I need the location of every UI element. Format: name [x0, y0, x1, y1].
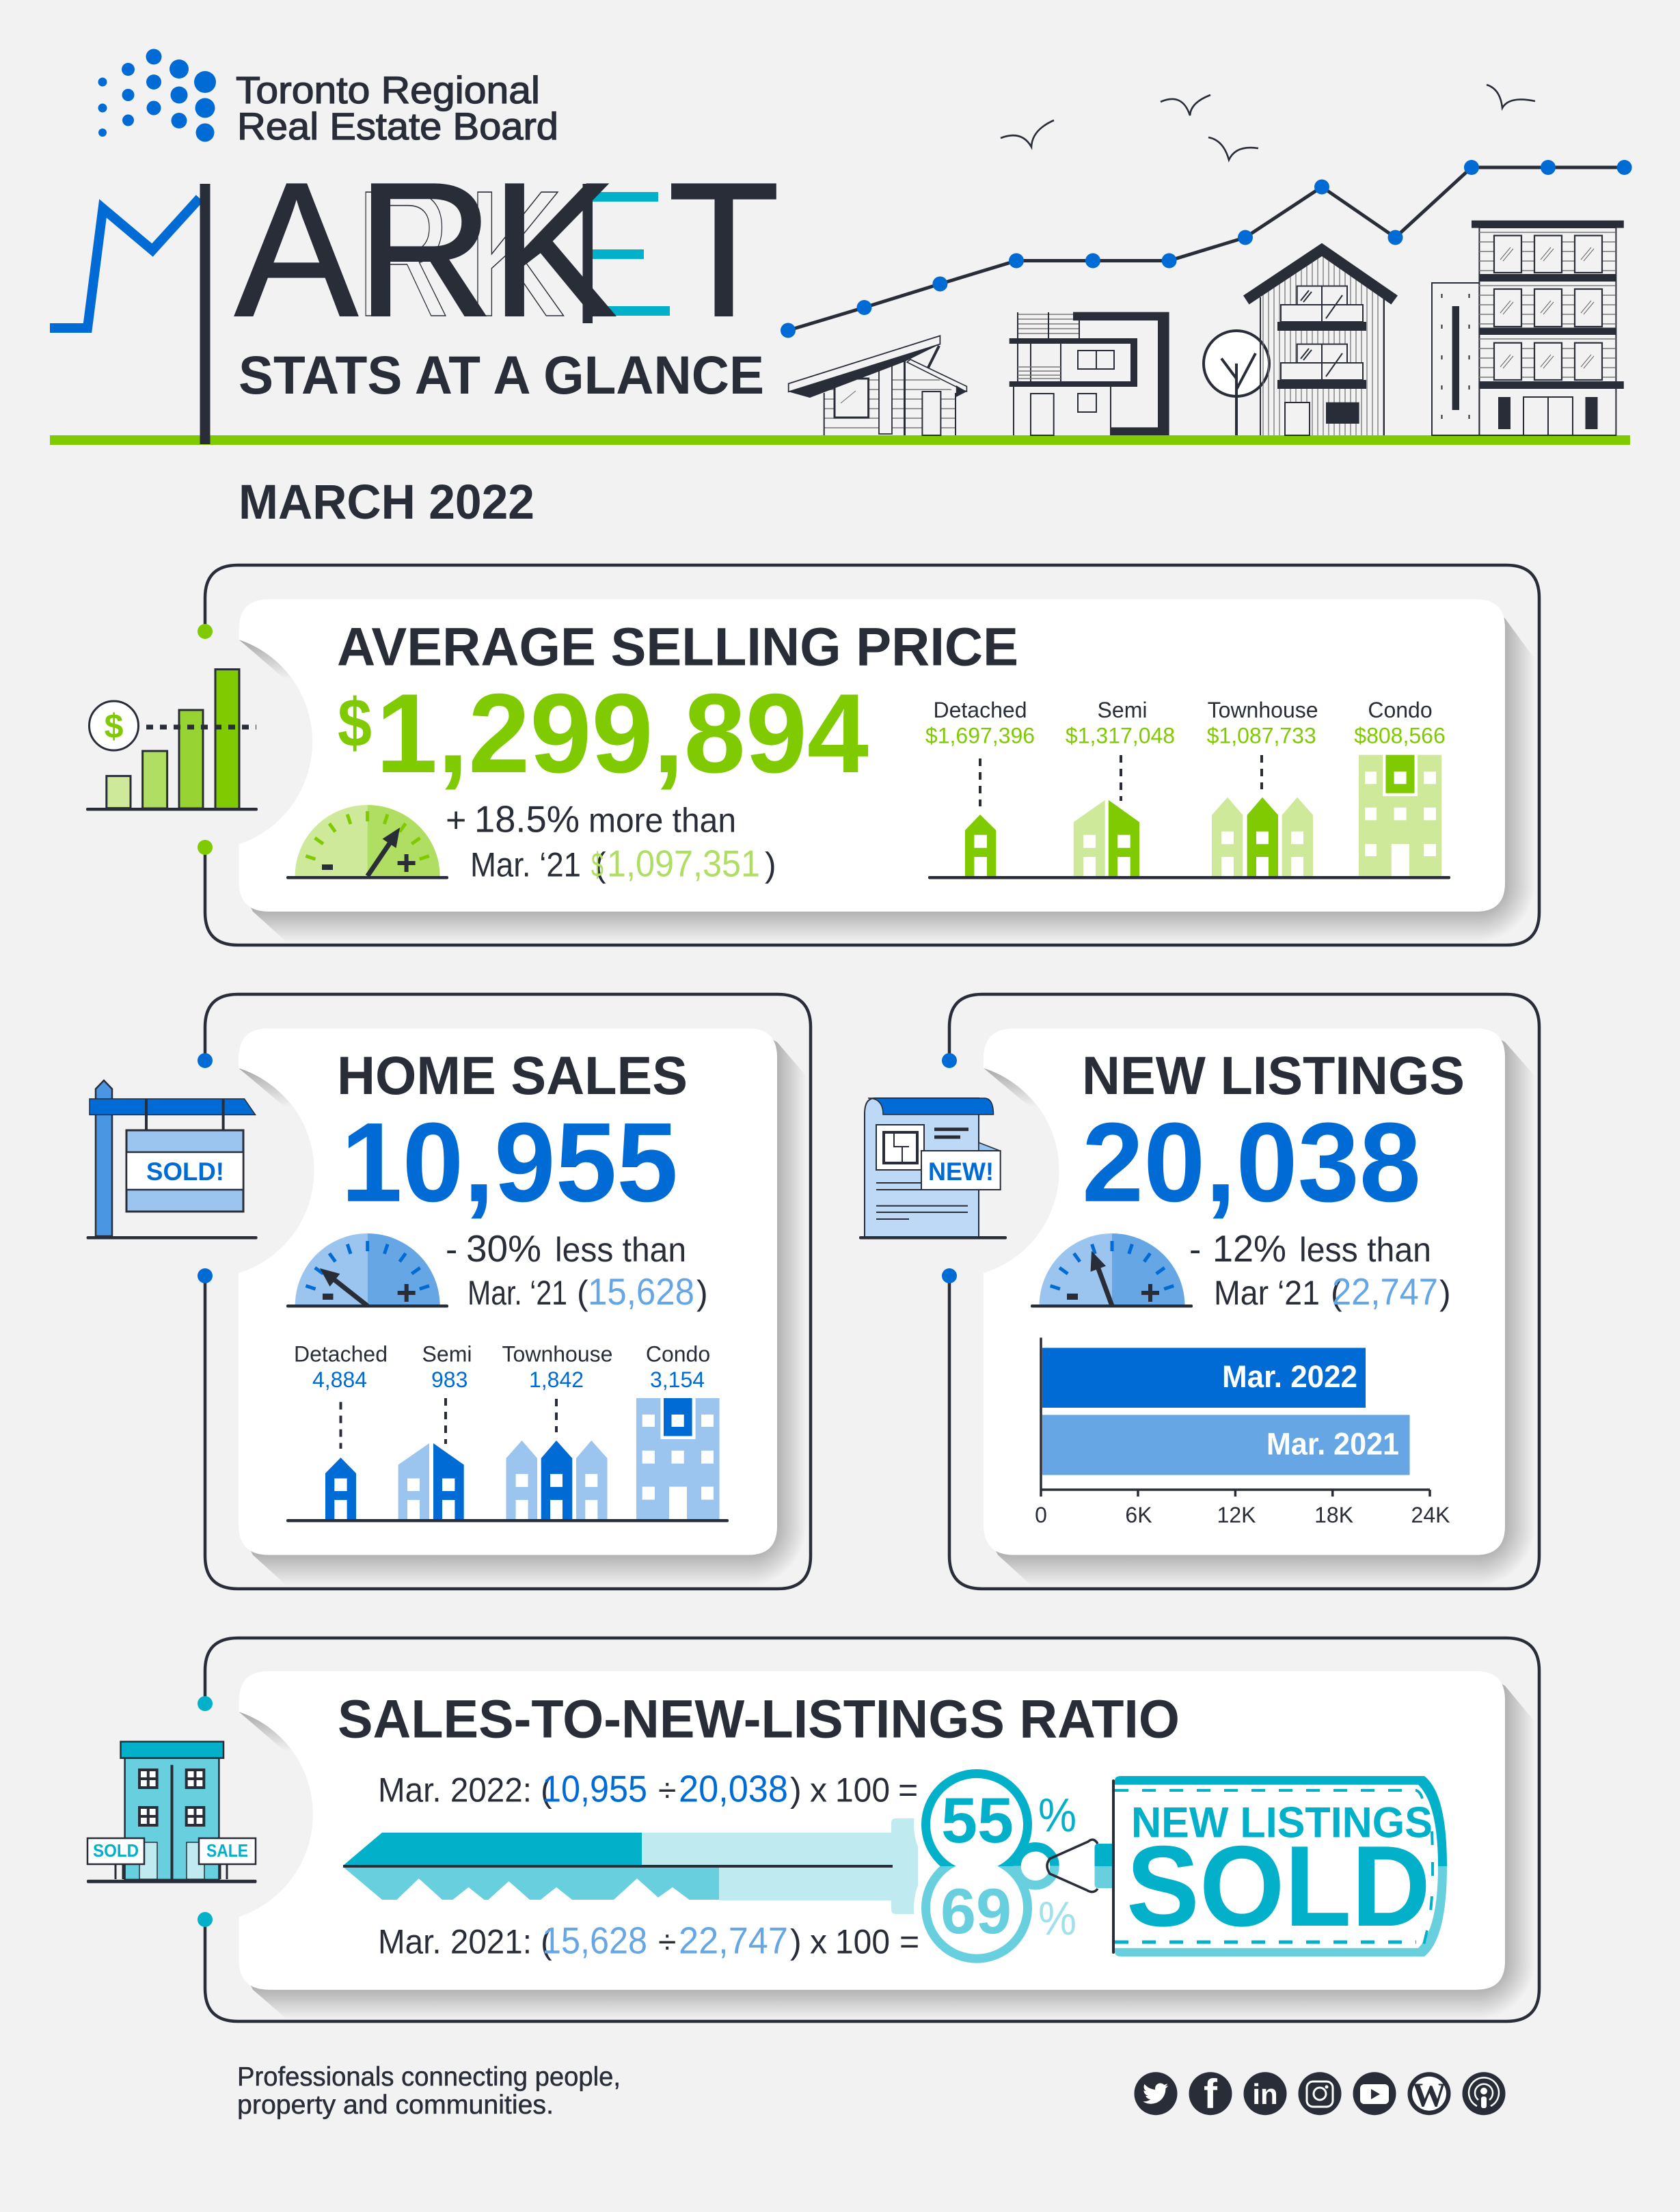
property type prices [925, 698, 1446, 748]
house: gable townhouse [1243, 243, 1398, 435]
big number: 20,038 [1082, 1100, 1421, 1225]
change text: 1,097,351 [607, 842, 760, 884]
change text: more than [588, 802, 736, 840]
formula: March 2022: ) [790, 1771, 802, 1810]
card shadow [239, 605, 1535, 942]
bar chart: listings [1035, 1338, 1450, 1527]
bar chart: listings: 24K [1411, 1503, 1450, 1527]
icon: logo dot cluster [98, 49, 216, 142]
icon: tree [1204, 331, 1269, 435]
tagline: property and communities. [237, 2090, 554, 2120]
change text: Mar. ‘21 [470, 846, 581, 884]
property type sales: 983 [431, 1367, 468, 1392]
logo wordmark: Toronto Regional [236, 68, 540, 111]
letter E bars [593, 192, 670, 316]
heading: SALES-TO-NEW-LISTINGS RATIO [338, 1689, 1180, 1749]
property type sales: 4,884 [312, 1367, 367, 1392]
birds [1001, 85, 1535, 160]
house: pitched roof [789, 336, 966, 435]
property type prices: $1,697,396 [925, 724, 1035, 748]
figure-eight percent badge: 55 [941, 1784, 1014, 1856]
change text: less than [1299, 1231, 1431, 1269]
semi [1074, 800, 1139, 876]
solid letters [234, 144, 780, 357]
property type prices: Townhouse [1208, 698, 1318, 722]
solid letters: A [234, 144, 359, 357]
formula: March 2021: Mar. 2021: [378, 1923, 532, 1961]
house: modern frame [1010, 312, 1169, 435]
white card [239, 599, 1505, 912]
icon: building for sale: SOLD [93, 1840, 139, 1861]
tagline: Professionals connecting people, [237, 2062, 621, 2092]
change text [1189, 1227, 1451, 1313]
formula: March 2021: x [810, 1923, 827, 1961]
formula: March 2022 [378, 1768, 918, 1810]
panel: average selling price [86, 565, 1539, 945]
formula: March 2021: = [899, 1923, 919, 1961]
logo wordmark [236, 68, 558, 148]
icon row: housing types [286, 1398, 729, 1523]
property type sales: Semi [422, 1342, 472, 1367]
logo wordmark: Real Estate Board [237, 105, 558, 148]
outlined letters: K [465, 153, 565, 354]
formula: March 2022: ÷ [658, 1773, 676, 1810]
change text: ( [595, 846, 606, 884]
property type prices: Semi [1098, 698, 1147, 722]
tagline [237, 2062, 621, 2120]
detached [325, 1458, 356, 1519]
panel: sales-to-new-listings ratio [87, 1638, 1539, 2021]
outlined letters: R [355, 153, 452, 354]
condo [636, 1398, 720, 1519]
connector dots [198, 1696, 213, 1927]
solid letters: K [490, 144, 617, 357]
change text: ) [696, 1274, 708, 1312]
price tag [1047, 1776, 1447, 1956]
bar chart: listings: 12K [1217, 1503, 1256, 1527]
property type sales: Detached [294, 1342, 388, 1367]
property type sales: Condo [646, 1342, 710, 1367]
white card [239, 1028, 777, 1555]
line chart: market trend [781, 160, 1632, 338]
icon: wordpress: W [1412, 2075, 1446, 2114]
key graphic [343, 1818, 918, 1914]
property type prices: $1,087,733 [1207, 724, 1316, 748]
property type sales: 3,154 [650, 1367, 705, 1392]
bar chart: listings: Mar. 2021 [1266, 1427, 1399, 1461]
change text: Mar. ‘21 [468, 1274, 567, 1312]
connector dots [198, 1053, 213, 1283]
panel outline [949, 994, 1539, 1589]
building: apartment tower [1432, 221, 1624, 435]
property type prices: Detached [934, 698, 1027, 722]
panel outline [205, 1638, 1539, 2021]
figure-eight percent badge: % [1038, 1892, 1076, 1945]
white card [239, 1671, 1505, 1990]
property type prices: $808,566 [1354, 724, 1446, 748]
icon: sold sign [87, 1080, 258, 1240]
card shadow [239, 1032, 807, 1586]
formula: March 2021 [378, 1920, 919, 1962]
formula: March 2022: 100 [835, 1771, 890, 1810]
letter M drawn as blue graph line [50, 198, 200, 328]
gauge: up [286, 805, 448, 879]
change text: ( [577, 1274, 588, 1312]
E stem [582, 184, 593, 323]
bar chart: listings: Mar. 2022 [1222, 1359, 1357, 1394]
icon: sold sign: SOLD! [146, 1158, 224, 1186]
figure-eight percent badge: 69 [940, 1875, 1012, 1947]
big number: 1,299,894 [376, 670, 869, 796]
property type sales: 1,842 [529, 1367, 584, 1392]
formula: March 2021: 22,747 [679, 1920, 788, 1962]
icon: facebook [1189, 2071, 1232, 2117]
ground line [50, 435, 1630, 445]
change text: 22,747 [1332, 1270, 1438, 1313]
formula: March 2021: 15,628 [542, 1920, 647, 1962]
townhouse [1212, 797, 1313, 876]
outlined letters [355, 153, 565, 354]
condo [1359, 755, 1441, 876]
heading: NEW LISTINGS [1082, 1045, 1465, 1106]
subtitle: STATS AT A GLANCE [239, 344, 764, 405]
change text: 30% [466, 1227, 541, 1270]
icon: new listing document [859, 1098, 1007, 1240]
formula: March 2022: 10,955 [542, 1768, 647, 1810]
logo: Toronto Regional Real Estate Board [98, 49, 558, 148]
solid letters: R [356, 144, 494, 357]
card shadow [239, 1676, 1535, 2019]
icon: new listing document: NEW! [928, 1158, 994, 1186]
icon: building for sale [87, 1742, 257, 1883]
bar chart: listings: 6K [1125, 1503, 1152, 1527]
panel: home sales [87, 994, 811, 1589]
figure-eight percent badge: % [1038, 1788, 1076, 1842]
formula: March 2022: ( [541, 1771, 552, 1810]
big number: $ [338, 685, 372, 761]
formula: March 2022: Mar. 2022: [378, 1771, 532, 1810]
change text: 12% [1212, 1227, 1286, 1270]
change text: + [446, 801, 466, 841]
semi [398, 1443, 464, 1519]
big number: 10,955 [341, 1100, 678, 1225]
panel outline [205, 565, 1539, 945]
detached [965, 815, 996, 876]
change text: less than [555, 1231, 686, 1269]
change text: Mar ‘21 [1214, 1274, 1320, 1312]
property type sales: Townhouse [502, 1342, 612, 1367]
icon: facebook: f [1204, 2071, 1218, 2117]
white card [984, 1028, 1505, 1555]
panel: new listings [859, 994, 1539, 1589]
property type sales [294, 1342, 710, 1392]
ring [1016, 1847, 1055, 1885]
title: MARKET [50, 144, 780, 357]
icon: price bar chart [86, 670, 258, 810]
icon: building for sale: SALE [206, 1840, 248, 1861]
change text: - [446, 1230, 457, 1270]
icon: instagram [1299, 2072, 1341, 2115]
gauge: down [1031, 1233, 1193, 1308]
price tag: SOLD [1126, 1822, 1431, 1950]
heading: AVERAGE SELLING PRICE [337, 616, 1018, 677]
connector dots [942, 1053, 957, 1283]
change text: 18.5% [474, 798, 580, 841]
vertical post [200, 184, 211, 444]
change text: $ [591, 846, 604, 884]
change text: ( [1331, 1274, 1342, 1312]
change text: ) [1439, 1274, 1451, 1312]
icon: price bar chart: $ [105, 707, 124, 746]
icon: podcast [1463, 2072, 1505, 2115]
formula: March 2022: x [810, 1771, 827, 1810]
change text: 15,628 [588, 1270, 694, 1313]
bar chart: listings: 18K [1314, 1503, 1353, 1527]
formula: March 2021: 100 [835, 1923, 890, 1961]
icon: youtube [1353, 2072, 1396, 2115]
icon: linkedin: in [1252, 2078, 1278, 2110]
townhouse [506, 1440, 607, 1519]
panel outline [205, 994, 811, 1589]
icon row: housing types [928, 755, 1450, 879]
social media icons [1135, 2071, 1505, 2117]
price tag: NEW LISTINGS [1131, 1799, 1433, 1847]
gauge: down [286, 1233, 448, 1308]
change text [446, 798, 776, 884]
property type prices: Condo [1368, 698, 1433, 722]
bar chart: listings: 0 [1035, 1503, 1047, 1527]
change text [446, 1227, 708, 1313]
property type prices: $1,317,048 [1066, 724, 1175, 748]
formula: March 2022: = [898, 1771, 918, 1810]
figure-eight percent badge [921, 1769, 1076, 1963]
formula: March 2021: ) [790, 1923, 802, 1961]
icon: twitter [1135, 2072, 1177, 2115]
change text: ) [765, 846, 776, 884]
icon: linkedin [1244, 2072, 1286, 2115]
formula: March 2022: 20,038 [679, 1768, 788, 1810]
heading: HOME SALES [337, 1045, 688, 1106]
formula: March 2021: ( [541, 1923, 552, 1961]
connector dots [198, 624, 213, 855]
solid letters: T [668, 144, 780, 357]
date heading: MARCH 2022 [239, 476, 534, 530]
formula: March 2021: ÷ [658, 1925, 676, 1961]
change text: - [1189, 1230, 1201, 1270]
card shadow [984, 1032, 1535, 1586]
